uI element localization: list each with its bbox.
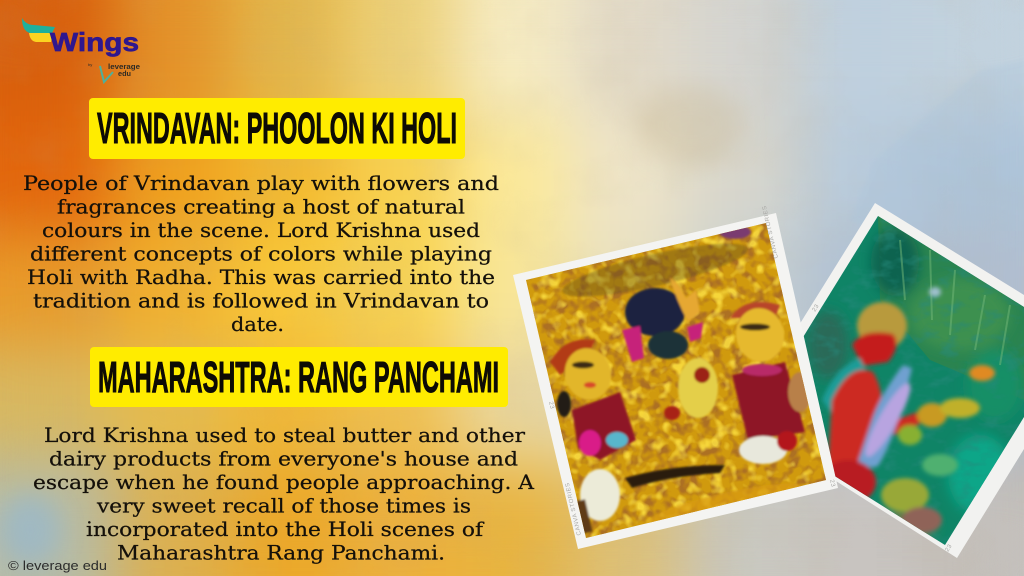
copyright note: © leverage edu <box>8 558 107 573</box>
text block: Maharashtra description: Lord Krishna used to steal butter and other <box>44 423 525 447</box>
frame marks: right photo: 23 <box>945 543 954 553</box>
by leverage edu mark: by <box>88 62 92 67</box>
text block: Maharashtra description: Maharashtra Rang Panchami. <box>117 540 445 564</box>
text block: Vrindavan description <box>23 171 499 336</box>
text block: Vrindavan description: different concepts of colors while playing <box>30 242 492 266</box>
frame marks: left photo <box>547 205 836 536</box>
icon: teal and yellow wing <box>22 18 55 42</box>
by leverage edu mark: edu <box>118 71 131 78</box>
text block: Maharashtra description: very sweet recall of those times is <box>96 494 471 518</box>
by leverage edu mark <box>88 62 140 82</box>
heading: Maharashtra: MAHARASHTRA: RANG PANCHAMI <box>98 353 499 402</box>
text block: Vrindavan description: colours in the scene. Lord Krishna used <box>42 218 480 242</box>
frame marks: left photo: 23 <box>547 401 555 410</box>
text block: Maharashtra description: dairy products from everyone's house and <box>49 446 518 470</box>
text block: Vrindavan description: date. <box>231 312 284 336</box>
frame marks: right photo: 23 <box>812 303 821 313</box>
text block: Vrindavan description: People of Vrindavan play with flowers and <box>23 171 499 195</box>
wordmark: Wings <box>50 27 139 57</box>
logo: Wings by leverage edu <box>22 18 140 82</box>
heading: Vrindavan: VRINDAVAN: PHOOLON KI HOLI <box>97 104 457 153</box>
frame marks: left photo: CANVA STORIES <box>565 482 583 536</box>
frame marks: left photo: CANVA STORIES <box>762 205 780 259</box>
text block: Maharashtra description: escape when he found people approaching. A <box>33 470 535 494</box>
heading: Maharashtra <box>90 347 508 407</box>
by leverage edu mark: leverage <box>108 64 140 71</box>
text block: Maharashtra description: incorporated into the Holi scenes of <box>86 517 485 541</box>
frame marks: right photo <box>812 303 954 553</box>
photo: Radha and Krishna deities covered in flowers <box>513 205 838 549</box>
photo: woman with drum in green colours <box>800 203 1024 558</box>
text block: Vrindavan description: tradition and is followed in Vrindavan to <box>33 288 489 312</box>
frame marks: left photo: 23 <box>828 479 836 488</box>
text block: Vrindavan description: fragrances creating a host of natural <box>57 194 465 218</box>
heading: Vrindavan <box>89 98 465 159</box>
text block: Maharashtra description <box>33 423 535 564</box>
text block: Vrindavan description: Holi with Radha. This was carried into the <box>27 265 495 289</box>
